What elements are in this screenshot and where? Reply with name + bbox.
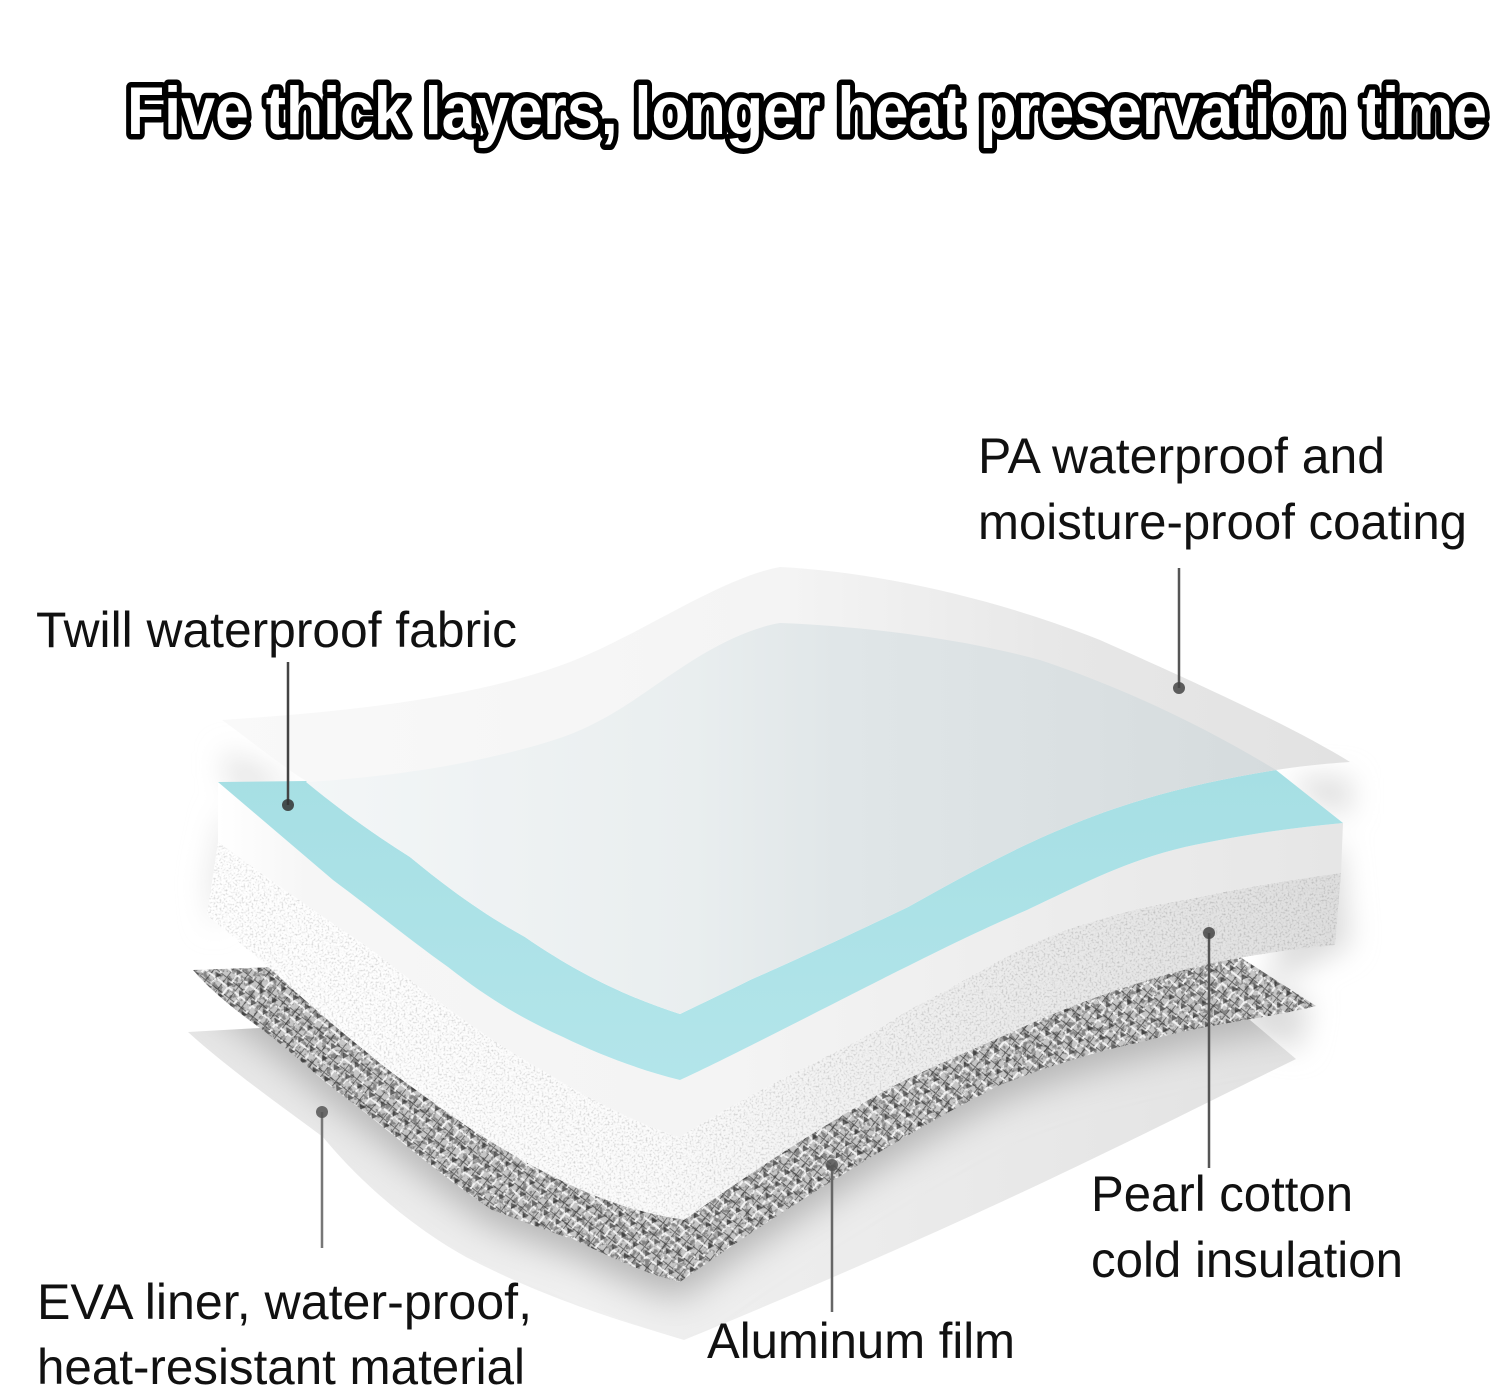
layered material diagram [37,436,1464,1384]
callout: PA waterproof and moisture-proof coating [978,428,1467,694]
layer: pearl cotton [207,842,1341,1220]
layer: coating panel [306,623,1276,1014]
layer: top sheet [222,567,1350,1014]
callout: Twill waterproof fabric: Twill waterproof fabric [36,602,517,658]
callout: Pearl cotton cold insulation: Pearl cotton [1091,1166,1353,1222]
callout: Twill waterproof fabric [36,602,517,811]
callout: Pearl cotton cold insulation: cold insulation [1091,1232,1403,1288]
callout: Pearl cotton cold insulation [1091,927,1403,1288]
callout: EVA liner, water-proof, heat-resistant material: EVA liner, water-proof, [37,1274,532,1330]
layer: EVA liner [188,1020,1296,1340]
callout: Aluminum film [707,1159,1015,1369]
callout: PA waterproof and moisture-proof coating: moisture-proof coating [978,494,1467,550]
soft shadows between layers [207,750,1350,1050]
callout: EVA liner, water-proof, heat-resistant material [37,1106,532,1389]
layer: blue film [218,770,1343,1080]
layer: white backing under blue film [218,782,1343,1137]
callout: Aluminum film: Aluminum film [707,1313,1015,1369]
layer: aluminum film [193,957,1316,1282]
callout: PA waterproof and moisture-proof coating: PA waterproof and [978,428,1385,484]
